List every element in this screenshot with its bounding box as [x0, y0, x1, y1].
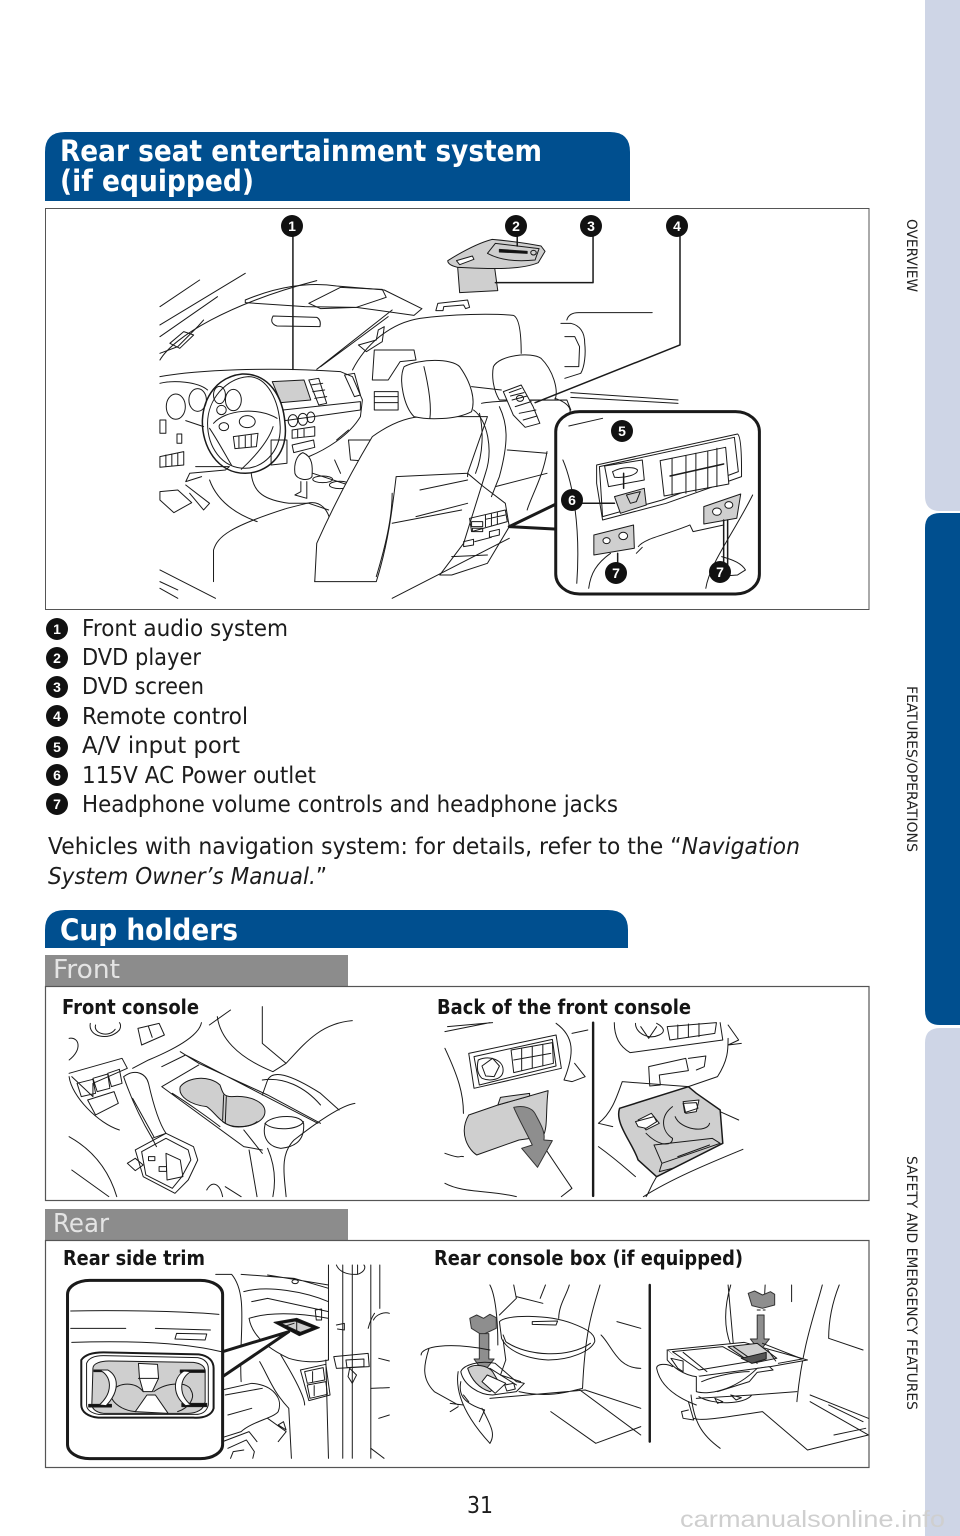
- front console cup holders: [69, 1007, 355, 1197]
- callout marker 6: [561, 489, 583, 511]
- legend list: 1: [53, 621, 61, 637]
- legend list: A/V input port: [82, 733, 240, 759]
- sidebar label: overview: OVERVIEW: [903, 219, 919, 292]
- sidebar: overview tab: [925, 0, 960, 511]
- legend list: [46, 616, 618, 818]
- rear console box: closed: [421, 1285, 641, 1443]
- sidebar: features and operations tab: [925, 513, 960, 1025]
- legend list: DVD screen: [82, 674, 204, 700]
- panel: front cup holders: [46, 986, 869, 1200]
- label: rear console box: Rear console box (if equipped): [434, 1246, 743, 1270]
- callout marker 3: [580, 215, 602, 237]
- legend list: 6: [53, 767, 61, 783]
- panel: entertainment system diagram: [46, 208, 869, 610]
- sidebar: safety tab: [925, 1028, 960, 1536]
- heading: cup holders: Cup holders: [60, 913, 238, 947]
- legend list: Front audio system: [82, 616, 288, 642]
- inset: rear trim cup holder detail: [68, 1280, 223, 1459]
- navigation note text: Vehicles with navigation system: for details, refer to the “Navigation: [48, 834, 800, 860]
- subheading: front: [45, 955, 348, 986]
- callout marker 7 right: 7: [716, 564, 724, 580]
- lower lines: [160, 538, 509, 598]
- sidebar label: features and operations: FEATURES/OPERATIONS: [903, 686, 919, 852]
- watermark: carmanualsonline.info: [680, 1506, 945, 1532]
- legend list: Remote control: [82, 704, 248, 730]
- label: rear side trim: Rear side trim: [63, 1246, 205, 1270]
- heading: rear seat entertainment system: (if equipped): [60, 164, 254, 198]
- icon: remote control: [503, 385, 540, 427]
- subheading: rear: [45, 1209, 348, 1240]
- legend list: 3: [53, 679, 61, 695]
- rear side trim door: [215, 1265, 389, 1458]
- subheading: front: Front: [53, 955, 120, 985]
- sidebar label: safety: SAFETY AND EMERGENCY FEATURES: [903, 1156, 919, 1410]
- legend list: Headphone volume controls and headphone jacks: [82, 792, 618, 818]
- callout marker 1: 1: [288, 218, 296, 234]
- navigation note text: [48, 834, 800, 890]
- legend list: 115V AC Power outlet: [82, 763, 316, 789]
- leader lines: [292, 230, 294, 369]
- legend list: 5: [53, 739, 61, 755]
- illustration: vehicle interior line art: [160, 230, 759, 598]
- heading: rear seat entertainment system: Rear seat entertainment system: [60, 134, 542, 168]
- illustration: front console and back of console: [69, 1007, 743, 1197]
- page number: 31: [467, 1493, 493, 1519]
- legend list: 4: [53, 708, 61, 724]
- callout marker 4: [666, 215, 688, 237]
- callout marker 5: 5: [618, 423, 626, 439]
- label: front console: Front console: [62, 995, 199, 1019]
- callout marker 2: [505, 215, 527, 237]
- inset pointer: [509, 503, 559, 529]
- back of console: deployed holder: [598, 1023, 743, 1197]
- legend list: 2: [53, 650, 61, 666]
- legend list: DVD player: [82, 645, 201, 671]
- callout marker 5: [611, 420, 633, 442]
- panel: rear cup holders: [46, 1240, 869, 1468]
- driver seat: [214, 503, 331, 582]
- callout marker 2: 2: [512, 218, 520, 234]
- callout marker 7 left: 7: [612, 565, 620, 581]
- roof and mirror lines: [160, 273, 317, 360]
- callout marker 7 left: [605, 562, 627, 584]
- label: back of the front console: Back of the front console: [437, 995, 691, 1019]
- callout marker 3: 3: [587, 218, 595, 234]
- callout marker 7 right: [709, 561, 731, 583]
- rear console box: open: [657, 1285, 868, 1450]
- heading: cup holders: [45, 910, 628, 948]
- navigation note text: System Owner’s Manual.”: [48, 864, 327, 890]
- legend list: 7: [53, 796, 61, 812]
- inset: rear console detail: [556, 412, 759, 594]
- icon: overhead DVD player: [448, 239, 545, 293]
- heading: rear seat entertainment system: [45, 132, 630, 201]
- inset pointer: [223, 1332, 289, 1377]
- back of console: open cover: [445, 1023, 593, 1197]
- callout marker 1: [281, 215, 303, 237]
- icon: dashboard and steering wheel: [160, 350, 416, 522]
- rear console panel of seat: [470, 510, 507, 532]
- subheading: rear: Rear: [53, 1209, 109, 1239]
- illustration: rear side trim and console box: [68, 1265, 868, 1459]
- rear passenger seat: [493, 355, 556, 400]
- callout marker 6: 6: [568, 492, 576, 508]
- callout marker 4: 4: [673, 218, 681, 234]
